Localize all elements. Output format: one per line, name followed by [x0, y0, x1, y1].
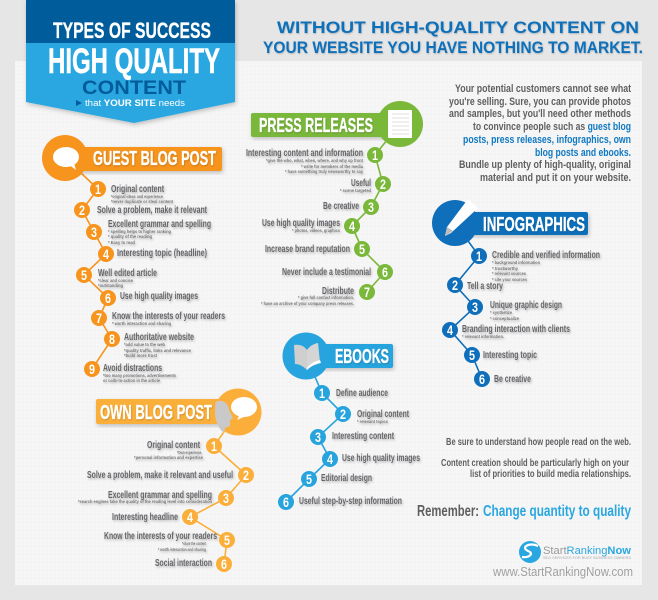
closing text block — [441, 437, 631, 480]
logo: Start Ranking Now — [492, 541, 633, 579]
step 6: 6 — [479, 371, 485, 387]
step 4: Branding interaction with clients — [462, 323, 570, 335]
step 1 — [471, 248, 600, 283]
step 5: 5 — [469, 347, 475, 363]
step 3 — [78, 489, 234, 506]
step 2: Solve a problem, make it relevant and useful — [87, 469, 233, 481]
intro text block: blog posts and ebooks. — [535, 147, 631, 159]
step 3: 3 — [223, 490, 229, 506]
panel: guest blog post — [42, 135, 225, 384]
intro text block: to convince people such as guest blog — [473, 121, 631, 133]
step 2 — [87, 467, 254, 483]
step 3: * conceptualize — [490, 316, 519, 322]
step 1: * write for members of the media — [301, 164, 363, 170]
step 7: * worth interaction and sharing — [112, 321, 171, 327]
banner: title ribbon: TYPES OF SUCCESS — [53, 18, 211, 43]
step 2: Tell a story — [467, 280, 503, 292]
step 4 — [112, 509, 198, 525]
step 5: Know the interests of your readers — [104, 530, 217, 542]
step 1: *give the who, what, when, where, and why up front — [266, 158, 363, 164]
step 3 — [467, 299, 562, 322]
step 1 — [90, 181, 173, 205]
step 3: * quality of the reading — [108, 234, 152, 240]
step 5 — [464, 347, 537, 363]
step 5: Increase brand reputation — [265, 243, 350, 255]
panel: ebooks — [278, 332, 420, 510]
step 9: Avoid distractions — [103, 362, 162, 374]
step 3 — [86, 218, 211, 246]
step 5 — [301, 471, 372, 487]
heading: guest blog post — [42, 135, 222, 181]
step 4: Interesting topic (headline) — [117, 247, 207, 259]
step 2: * scene targeted — [340, 188, 371, 194]
step 3: 3 — [315, 429, 321, 445]
step 3: Excellent grammar and spelling — [108, 218, 211, 230]
step 9: *too many promotions, advertisements — [103, 373, 176, 379]
step 5: 5 — [224, 532, 230, 548]
step 3 — [310, 429, 394, 445]
step 2: Useful — [351, 177, 371, 189]
step 6: Be creative — [494, 373, 531, 385]
banner: title ribbon — [26, 0, 235, 123]
step 7 — [261, 284, 375, 307]
step 6: 6 — [382, 264, 388, 280]
step 2: Original content — [357, 408, 409, 420]
step 1: Original content — [147, 439, 200, 451]
step 8: *quality traffic, links and relevance — [124, 348, 191, 354]
heading: own blog post — [96, 388, 262, 436]
step 1: Credible and verified information — [492, 249, 600, 261]
heading: own blog post: OWN BLOG POST — [100, 402, 212, 424]
heading: infographics — [432, 200, 588, 246]
step 3: Be creative — [323, 200, 359, 212]
step 6: Useful step-by-step information — [299, 495, 402, 507]
step 7: Distribute — [322, 285, 354, 297]
step 2: 2 — [340, 406, 346, 422]
step 7: * have an archive of your company press releases. — [261, 301, 354, 307]
step 7 — [91, 310, 225, 327]
heading: press releases: PRESS RELEASES — [259, 115, 373, 137]
step 3: *search engines take the quality of the reading level into consideration — [78, 499, 212, 505]
step 2 — [447, 277, 503, 293]
step 4: 4 — [187, 509, 193, 525]
icon: head with speech bubble — [215, 397, 257, 433]
step 1: *personal information and expertise — [134, 455, 203, 461]
step 1: * relevant sources — [492, 271, 526, 277]
step 2 — [335, 406, 409, 425]
banner: title ribbon: CONTENT — [82, 78, 186, 99]
step 3: 3 — [91, 224, 97, 240]
banner: title ribbon: that YOUR SITE needs — [85, 98, 186, 108]
step 6 — [100, 290, 198, 306]
heading: ebooks: EBOOKS — [335, 346, 389, 368]
logo: Start Ranking Now: StartRankingNow — [543, 545, 631, 557]
step 9: 9 — [89, 361, 95, 377]
step 2 — [74, 202, 207, 218]
step 1: *never duplicate or steal content — [111, 199, 173, 205]
step 5: Editorial design — [321, 472, 372, 484]
step 4: 4 — [349, 218, 355, 234]
step 5 — [76, 267, 157, 289]
step 4: 4 — [447, 322, 453, 338]
step 3: Unique graphic design — [490, 299, 562, 311]
step 6 — [278, 494, 402, 510]
step 5: 5 — [306, 471, 312, 487]
step 6: Social interaction — [155, 557, 212, 569]
step 6 — [155, 556, 232, 572]
step 1: *original ideas and experience — [111, 194, 163, 200]
step 5: *clear and concise — [98, 278, 133, 284]
step 3: Interesting content — [332, 430, 394, 442]
step 3: 3 — [472, 299, 478, 315]
step 5 — [104, 530, 235, 553]
step 3: * synthetize — [490, 310, 512, 316]
step 4: 4 — [327, 451, 333, 467]
heading: ebooks — [282, 332, 393, 380]
step 5: Well edited article — [98, 267, 157, 279]
step 8 — [104, 331, 194, 359]
step 5: *outstanding — [98, 283, 123, 289]
step 1 — [134, 438, 222, 461]
step 2: 2 — [243, 467, 249, 483]
step 1: Original content — [111, 183, 164, 195]
step 4 — [262, 217, 360, 234]
step 1: *Own experience. — [177, 450, 202, 456]
step 1: * trustworthy — [492, 266, 518, 272]
callout: remember — [417, 503, 631, 520]
step 1: * have something truly newsworthy to say — [285, 169, 363, 175]
step 6 — [282, 264, 393, 280]
step 1 — [246, 147, 383, 175]
step 4 — [98, 246, 207, 262]
step 1: * background information — [492, 260, 540, 266]
step 5: * worth interaction and sharing — [158, 547, 206, 553]
step 1: 1 — [95, 181, 101, 197]
step 1: 1 — [211, 438, 217, 454]
step 2: Solve a problem, make it relevant — [97, 204, 207, 216]
step 6 — [474, 371, 531, 387]
headline — [263, 19, 643, 57]
step 4 — [322, 451, 420, 467]
panel: own blog post — [78, 388, 262, 572]
panel: infographics — [432, 199, 600, 387]
logo: Start Ranking Now: SEO SERVICES FOR BUSY BUSINESS OWNERS — [543, 556, 632, 560]
step 2: 2 — [452, 277, 458, 293]
step 4: Interesting headline — [112, 511, 178, 523]
step 2: 2 — [380, 176, 386, 192]
step 2: 2 — [79, 202, 85, 218]
step 6: Use high quality images — [120, 290, 198, 302]
step 1 — [314, 385, 388, 401]
intro text block — [449, 83, 631, 184]
icon: pencil — [445, 199, 478, 236]
step 3: 3 — [368, 199, 374, 215]
step 4: 4 — [103, 246, 109, 262]
logo: Start Ranking Now: www.StartRankingNow.com — [492, 564, 633, 579]
step 1: 1 — [372, 147, 378, 163]
step 4 — [442, 322, 570, 340]
step 3: * Easy to read — [108, 240, 135, 246]
heading: press releases — [251, 101, 423, 147]
step 4: Use high quality images — [262, 217, 340, 229]
step 5: *share the content — [182, 541, 206, 547]
step 1: Define audience — [336, 387, 388, 399]
step 9: or calls-to-action in the article — [103, 378, 160, 384]
step 8: *build more trust — [124, 353, 157, 359]
step 1: 1 — [319, 385, 325, 401]
step 7: * give full contact information. — [298, 295, 354, 301]
step 6: Never include a testimonial — [282, 266, 371, 278]
step 1: * cite your sources — [492, 277, 527, 283]
step 7: Know the interests of your readers — [112, 310, 225, 322]
step 3: * spelling helps to higher ranking — [108, 229, 171, 235]
headline: WITHOUT HIGH-QUALITY CONTENT ON — [277, 19, 639, 37]
step 4: * relevant information. — [462, 334, 504, 340]
step 7: 7 — [96, 310, 102, 326]
banner: title ribbon: HIGH QUALITY — [48, 42, 220, 81]
step 8: *add value to the web — [124, 342, 165, 348]
step 5: Interesting topic — [483, 349, 537, 361]
callout: remember: Remember: — [417, 503, 479, 520]
heading: infographics: INFOGRAPHICS — [483, 214, 585, 236]
step 6: 6 — [221, 556, 227, 572]
step 2 — [340, 176, 391, 194]
step 5 — [265, 241, 370, 257]
icon: document — [388, 110, 412, 138]
icon: speech bubble — [53, 147, 79, 170]
heading: guest blog post: GUEST BLOG POST — [93, 148, 216, 170]
step 6: 6 — [105, 290, 111, 306]
step 1: Interesting content and information — [246, 147, 363, 159]
panel: press releases — [246, 101, 423, 307]
step 8: Authoritative website — [124, 331, 194, 343]
icon: open book — [294, 343, 321, 370]
step 9 — [84, 361, 176, 384]
step 5: 5 — [359, 241, 365, 257]
step 4: Use high quality images — [342, 452, 420, 464]
step 8: 8 — [109, 331, 115, 347]
step 5: 5 — [81, 267, 87, 283]
step 2: * relevant topics — [357, 419, 388, 425]
step 4: * photos, videos, graphics — [292, 228, 340, 234]
step 6: 6 — [283, 494, 289, 510]
step 3: Excellent grammar and spelling — [108, 489, 212, 501]
step 1: 1 — [476, 248, 482, 264]
step 7: 7 — [364, 284, 370, 300]
headline: YOUR WEBSITE YOU HAVE NOTHING TO MARKET. — [263, 39, 643, 57]
